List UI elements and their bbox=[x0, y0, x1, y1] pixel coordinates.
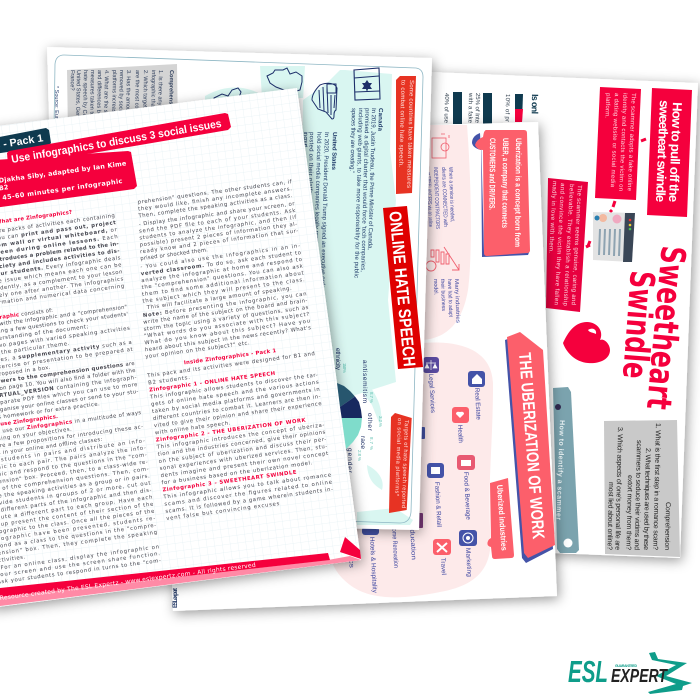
comprehension box: most lied about online? bbox=[606, 482, 614, 550]
comprehension box: 3. Has the amount of hate speech bbox=[124, 70, 131, 154]
right column text: inside zinfographics: for a business based on the uberization model. bbox=[161, 460, 313, 486]
industry: health: Health bbox=[456, 425, 464, 443]
right column text: activities: possible) present 2 pieces of information they al- bbox=[139, 222, 298, 249]
mini logo: ESLexpert bbox=[173, 588, 179, 608]
pink blob: industries bbox=[328, 342, 493, 597]
title: sweetheart swindle bbox=[614, 244, 693, 411]
right column text: activities: write the name of the subject on the board and brain- bbox=[143, 298, 308, 326]
text: when a service is needed bbox=[425, 167, 455, 229]
comprehension box: 2. Which targets of hate speech bbox=[141, 70, 148, 149]
right column text: activities bbox=[125, 179, 313, 360]
comprehension box: 1. Is there any information in the bbox=[156, 70, 163, 150]
source note: * Source: European Commission bbox=[53, 86, 59, 166]
chart labels: 15.8 % bbox=[342, 363, 347, 373]
text: united states: In 2020, President Donald Trump signed an executive order to bbox=[319, 132, 329, 298]
right column text: activities: Then, complete the speaking activities as a class. bbox=[137, 193, 293, 220]
comprehension box: infographic that surprises you? bbox=[149, 70, 156, 146]
chart labels: other bbox=[366, 413, 373, 432]
right column text: activities: they would like, finish any incomplete answers. bbox=[138, 186, 293, 213]
industry: travel: Travel bbox=[439, 558, 447, 576]
footer band bbox=[0, 537, 361, 606]
right column text: activities: Note: Before presenting the infographic, you can bbox=[143, 291, 307, 319]
step box: fake identity: The scammer adopts a fake online bbox=[626, 93, 636, 192]
pink blob: definitions bbox=[423, 125, 471, 340]
text: united states: in court bbox=[302, 132, 308, 147]
text: many industries: Many industries bbox=[453, 279, 461, 323]
right column text: inside zinfographics: scams. It is followed by a game wherein students in- bbox=[165, 487, 333, 515]
industry: food and beverage bbox=[457, 455, 475, 520]
right column text: inside zinfographics: vited to give their opinion and share their experience bbox=[154, 401, 322, 429]
stat bars: 25% of Inte bbox=[473, 93, 480, 124]
right column text: inside zinfographics: on the subject of uberization and discuss their per- bbox=[158, 437, 327, 465]
logo: esl expertz: ESL bbox=[568, 654, 608, 689]
text: many industries bbox=[432, 279, 461, 323]
icon: profile window bbox=[593, 212, 635, 262]
title box: how to pull off the sweetheart swindle bbox=[647, 88, 692, 217]
comprehension box: France? bbox=[69, 70, 75, 91]
right column text: inside zinfographics: vent false but convincing excuses bbox=[166, 501, 280, 522]
banner: online hate speech: ONLINE HATE SPEECH bbox=[385, 210, 419, 367]
icon: canada map bbox=[267, 68, 302, 97]
icon: heart bbox=[563, 322, 610, 363]
right column text: activities: analyze the infographic at home and respond to bbox=[141, 257, 302, 284]
callout: targets of hate speech: Targets of hate speech reported bbox=[400, 420, 409, 508]
right column text: activities: send the PDF file to each of your students. Ask bbox=[139, 208, 297, 235]
banner: use infographics: Use infographics to discuss 3 social issues bbox=[10, 118, 222, 166]
right column text: inside zinfographics: gets of online hate speech and the various actions bbox=[151, 380, 319, 408]
text: united states bbox=[302, 132, 337, 298]
logo: esl expertz: GUARANTEED bbox=[615, 664, 637, 668]
comprehension box: Comprehension bbox=[167, 70, 174, 113]
right column text: activities: them to find some additional information about bbox=[142, 270, 304, 298]
callout: uberization definition bbox=[472, 130, 530, 257]
industry: renovation, education, hospitality and logistics labels: Hotels & Hospitality bbox=[368, 537, 378, 594]
tag: how to identify a scammer bbox=[553, 387, 579, 553]
step box: fake identity bbox=[595, 87, 641, 200]
heading: is online dating safe: Is onl bbox=[530, 94, 540, 114]
right column text: inside zinfographics: with online hate speech. bbox=[155, 420, 231, 436]
industry: renovation, education, hospitality and logistics labels: Home Renovation bbox=[390, 525, 399, 568]
comprehension box: platforms increased? bbox=[110, 70, 117, 122]
text: when a service is needed: clients are CONNECTED with bbox=[440, 167, 448, 227]
right column text: inside zinfographics bbox=[145, 343, 335, 522]
right column text: inside zinfographics: Zinfographic 2 - THE UBERIZATION OF WORK bbox=[156, 418, 307, 444]
right column text: inside zinfographics: This infographic introduces the concept of uberiza- bbox=[155, 422, 325, 451]
comprehension box: United States, Germany and bbox=[74, 70, 81, 141]
industry: renovation, education, hospitality and logistics labels bbox=[346, 427, 425, 594]
comprehension box: hate speech by Canada, the bbox=[81, 70, 88, 140]
text: united states: hold social media companies legally responsible for content bbox=[311, 132, 321, 292]
industry: real estate: Real Estate bbox=[473, 388, 482, 420]
icon: canada flag bbox=[354, 68, 380, 100]
title: sweetheart swindle: Sweetheart bbox=[638, 244, 693, 411]
icon: country outline bbox=[214, 88, 241, 102]
callout: some countries: Some countries have taken measures bbox=[405, 80, 414, 188]
right column text: inside zinfographics: dents imagine and present their own novel concept bbox=[160, 451, 329, 479]
callout: some countries: to combat online hate speech. bbox=[397, 80, 405, 167]
comprehension box: and differences between the bbox=[95, 70, 102, 140]
comprehension box: removed by social media bbox=[117, 70, 124, 133]
right column text: activities: students to analyze the infographic, and then (if bbox=[139, 215, 297, 242]
chart labels: race bbox=[359, 436, 366, 449]
stat bars: with a fake bbox=[466, 92, 473, 124]
left column text bbox=[0, 204, 162, 586]
sheet: teacher's notes bbox=[0, 88, 361, 608]
chart labels: ethnicity bbox=[334, 348, 341, 371]
comprehension box bbox=[604, 420, 680, 557]
text: canada bbox=[348, 108, 383, 278]
title band: the uberization of work: THE UBERIZATION OF WORK bbox=[515, 352, 548, 540]
comprehension box: 3. Which aspects of one's personal life are bbox=[613, 427, 623, 550]
text: canada: promised a digital charter that would force 'tech companies, bbox=[359, 108, 369, 272]
step box: gains trust: madly in love with them. bbox=[547, 181, 557, 253]
comprehension box: measures taken to combat online bbox=[88, 70, 95, 152]
left column text: Ask your students to respond in turns to the "com- bbox=[0, 558, 161, 586]
chart labels: gender bbox=[346, 448, 353, 474]
industry: renovation, education, hospitality and logistics labels: Logistics bbox=[346, 535, 355, 569]
right column text: inside zinfographics: sonal experiences with uberized services. Then, stu- bbox=[159, 444, 328, 472]
comprehension box: are the most common online? bbox=[133, 70, 140, 144]
industry: food and beverage: Food & Beverage bbox=[462, 472, 472, 520]
text: when a service is needed: INDEPENDENT CONTRACTORS bbox=[432, 167, 440, 229]
text: many industries: their business bbox=[439, 279, 446, 311]
card border bbox=[64, 55, 423, 523]
sheet: the uberization of work bbox=[155, 122, 557, 611]
right column text: activities: ready know and 2 pieces of information that sur- bbox=[140, 228, 299, 255]
icon: us map bbox=[312, 83, 337, 119]
right column text: activities: the subject which they will present to the class. bbox=[142, 277, 305, 305]
chart labels: 8.7 % bbox=[369, 392, 374, 403]
right column text: activities: the "comprehension" questions. You can also ask bbox=[141, 263, 304, 291]
comprehension box: extort money from them? bbox=[624, 475, 633, 550]
right column text: activities: your opinion on the subject?" etc. bbox=[145, 340, 250, 360]
industry: fashion and retail bbox=[427, 463, 444, 528]
text: many industries: model. bbox=[432, 279, 439, 296]
logo: esl expertz bbox=[568, 652, 692, 694]
right column text: activities: storm the topic using a variety of questions, such as bbox=[143, 305, 309, 333]
stat bars: 10% of pr bbox=[504, 94, 510, 122]
step box: gains trust bbox=[546, 178, 588, 312]
text: canada: including web giants, to take more responsibility for the public bbox=[353, 108, 363, 278]
right column text: activities: verted classroom. To do so, ask each student to bbox=[141, 250, 301, 277]
text: united states: posted on their platforms, allowing them to be sued bbox=[304, 132, 314, 282]
right column text: activities: - Display the infographic and share your screen, or bbox=[138, 201, 296, 228]
right column text: activities: "What words do you associate with this subject? bbox=[144, 312, 310, 340]
industry: health bbox=[452, 407, 469, 443]
right column text: inside zinfographics: B2 students. bbox=[148, 375, 191, 386]
right column text: inside zinfographics: scams and discover the figures related to online bbox=[164, 479, 332, 508]
callout: some countries bbox=[396, 76, 416, 194]
industry: marketing bbox=[459, 530, 477, 577]
stat bars bbox=[442, 92, 523, 124]
right column text: activities: - You could also use the infographics in an in- bbox=[140, 243, 301, 271]
text: canada: In 2019, Justin Trudeau, the Prime Minister of Canada, bbox=[366, 108, 376, 250]
details box bbox=[0, 151, 137, 208]
text: united states: United States bbox=[330, 132, 337, 171]
tag: how to identify a scammer: How to identify a scammer bbox=[555, 420, 565, 520]
step box: gains trust: and convince the victim they have fallen bbox=[553, 183, 565, 305]
callout: uberization definition: Uberization is a concept born from bbox=[513, 138, 523, 247]
callout: uberization definition: UBER, a company that connects bbox=[500, 138, 510, 228]
title band: the uberization of work bbox=[505, 332, 555, 563]
text: when a service is needed: When a service is needed, bbox=[447, 167, 455, 222]
sheet: online hate speech bbox=[47, 47, 432, 530]
connector dashes bbox=[586, 139, 646, 247]
right column text: inside zinfographics: Zinfographic 1 - ONLINE HATE SPEECH bbox=[149, 371, 276, 394]
step box: fake identity: platform. bbox=[603, 93, 610, 118]
comprehension box: 1. What is the first step in a romance scam? bbox=[651, 423, 661, 550]
right column text: activities: prised or shocked them. bbox=[140, 247, 209, 262]
right column text: inside zinfographics: Inside Zinfographics - Pack 1 bbox=[184, 348, 277, 366]
industry: real estate bbox=[468, 371, 485, 420]
chart labels: 3.2 % bbox=[378, 416, 383, 427]
right column text: inside zinfographics: This pack and its activities were designed for B1 and bbox=[146, 351, 315, 379]
text: many industries: have had to adapt bbox=[446, 279, 453, 317]
pie chart: targets of hate speech bbox=[337, 383, 362, 449]
chart labels bbox=[334, 348, 383, 474]
right column text: inside zinfographics: Zinfographic 3 - SWEETHEART SWINDLE bbox=[162, 470, 297, 494]
callout: uberized industries: Uberized industries bbox=[495, 485, 509, 551]
industry: travel bbox=[433, 539, 451, 576]
comprehension box: Comprehension bbox=[663, 502, 671, 550]
right column text: inside zinfographics: taken by social media platforms and governments in bbox=[152, 387, 320, 415]
industry: legal services bbox=[423, 357, 439, 414]
title box: how to pull off the sweetheart swindle: sweetheart swindle bbox=[653, 100, 672, 202]
step box: gains trust: believable. They establish a relationship bbox=[562, 184, 574, 307]
right column text: activities: heard about this subject in the news recently? What's bbox=[145, 325, 312, 353]
right column text: activities: What do you know about this subject? Have you bbox=[144, 318, 311, 346]
callout: uberized industries bbox=[487, 478, 514, 559]
icon: connected network bbox=[432, 134, 449, 158]
industry: legal services: Legal Services bbox=[427, 374, 436, 414]
callout: uberization definition: CUSTOMERS and DRIVERS. bbox=[487, 138, 497, 210]
text: when a service is needed: or FREELANCERS via an online bbox=[425, 172, 433, 227]
right column text: inside zinfographics: tion and the industries concerned, give their opinions bbox=[157, 430, 326, 458]
logo: esl expertz: EXPERT bbox=[611, 666, 669, 686]
callout: targets of hate speech bbox=[389, 413, 412, 513]
icon: declining bars bbox=[426, 247, 459, 271]
right column text: inside zinfographics: different countries to combat it. Learners are then in- bbox=[153, 394, 321, 422]
step box: fake identity: a dating website or social media bbox=[609, 93, 619, 188]
comprehension box: scammers to seduce their victims and bbox=[633, 440, 642, 550]
right column text: activities: This will facilitate a large amount of speaking. bbox=[146, 286, 292, 311]
comprehension box bbox=[67, 64, 178, 154]
teal map background bbox=[205, 66, 413, 525]
stat bars: 40% of use bbox=[442, 93, 449, 124]
chart labels: antisemitism bbox=[361, 360, 368, 403]
industry: fashion and retail: Fashion & Retail bbox=[433, 482, 442, 528]
right column text: activities: prehension" questions. The other students can, if bbox=[138, 179, 292, 206]
step box: fake identity: identity and contacts the victim on bbox=[617, 93, 627, 191]
title box: how to pull off the sweetheart swindle: How to pull off the bbox=[666, 102, 685, 202]
right column text: inside zinfographics: This infographic allows students to discover the tar- bbox=[149, 372, 318, 401]
industry: marketing: Marketing bbox=[464, 548, 473, 577]
comprehension box: 2. What techniques are used by these bbox=[642, 448, 651, 550]
right column text: inside zinfographics: This infographic allows you to talk about romance bbox=[162, 472, 331, 501]
comprehension box: 4. What are the similarities bbox=[102, 70, 109, 136]
text: canada: Canada bbox=[376, 108, 383, 132]
logo arrow bbox=[648, 652, 692, 694]
industry: renovation, education, hospitality and logistics labels: Education bbox=[408, 524, 417, 561]
text: canada: spaces they are creating." bbox=[348, 108, 356, 173]
chart labels: 2.8 % bbox=[357, 450, 362, 461]
step box: gains trust: The scammer seems genuine, caring and bbox=[570, 185, 582, 305]
callout: targets of hate speech: on social media platforms* bbox=[393, 418, 402, 497]
title: sweetheart swindle: Swindle bbox=[614, 269, 662, 380]
footer band: Resource created by The ESL Expertz - www.eslexpertz.com - All rights reserved bbox=[0, 562, 256, 602]
sheet: sweetheart swindle bbox=[400, 72, 698, 558]
chart labels: 8.7 % bbox=[369, 437, 374, 450]
